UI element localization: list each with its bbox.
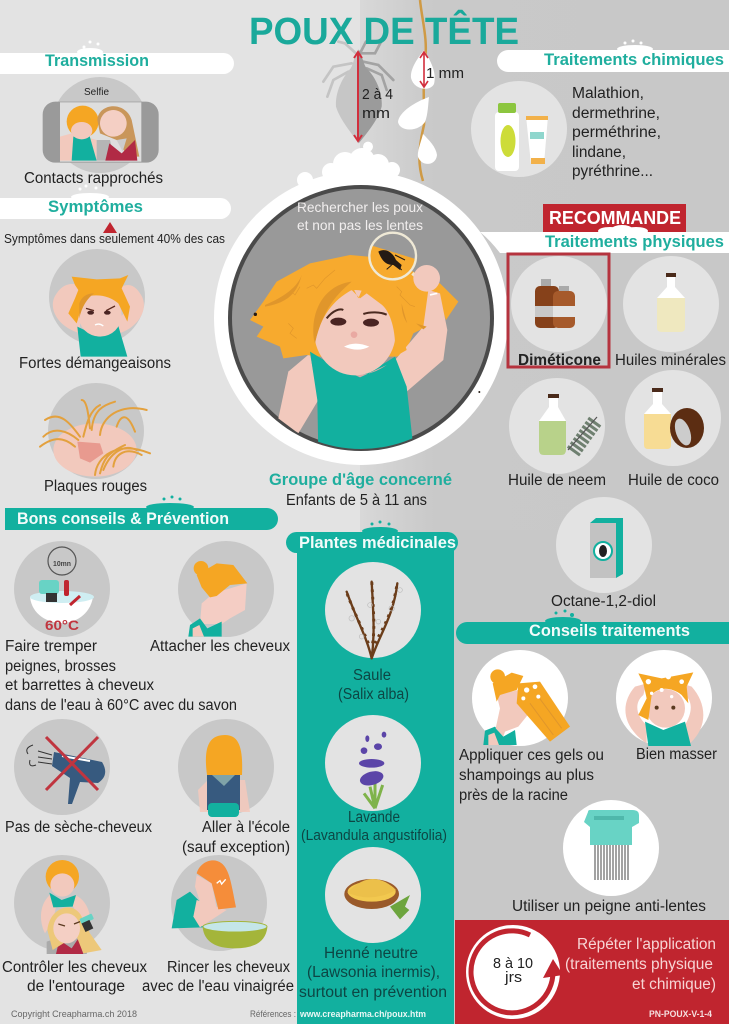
text: apply gel: près de la racine bbox=[459, 787, 568, 804]
text: check others: de l'entourage bbox=[27, 978, 125, 995]
plant: henna bbox=[325, 847, 421, 943]
title: POUX DE TÊTE bbox=[249, 9, 519, 53]
label: 2 à 4 mm: mm bbox=[362, 105, 390, 122]
icon: cycle 8 to 10 days: 8 à 10 bbox=[493, 955, 533, 972]
text: soak combs: dans de l'eau à 60°C avec du savon bbox=[5, 697, 237, 714]
panel: coconut oil bbox=[625, 370, 721, 466]
text: chemical list: dermethrine, bbox=[572, 105, 660, 122]
text: search lice bbox=[297, 199, 423, 233]
panel: school bbox=[178, 719, 274, 817]
panel: soak combs: 60°C bbox=[45, 617, 79, 633]
text: red patches: Plaques rouges bbox=[44, 478, 147, 495]
heading: plants: Plantes médicinales bbox=[299, 534, 456, 552]
arrow: 2 to 4 mm bbox=[354, 52, 362, 141]
section heading: physical treatments: Traitements physiques bbox=[545, 233, 724, 251]
text: chemical list: lindane, bbox=[572, 144, 626, 161]
section heading: treatment tips: Conseils traitements bbox=[529, 622, 690, 640]
section heading: prevention: Bons conseils & Prévention bbox=[17, 510, 229, 528]
text: chemical list: pyréthrine... bbox=[572, 163, 653, 180]
badge: recommended: RECOMMANDE bbox=[549, 208, 681, 228]
text: school: Aller à l'école bbox=[202, 819, 290, 836]
text: henna: Henné neutre bbox=[324, 945, 418, 962]
text: apply gel: Appliquer ces gels ou bbox=[459, 747, 604, 764]
text: repeat application: et chimique) bbox=[632, 976, 716, 993]
text: check others bbox=[2, 959, 147, 995]
icon: bottle bbox=[495, 103, 519, 171]
text: octane: Octane-1,2-diol bbox=[551, 593, 656, 610]
text: school bbox=[182, 819, 290, 856]
icon: oil bottle bbox=[657, 273, 685, 332]
icon: cycle 8 to 10 days bbox=[466, 925, 563, 1019]
text: willow: Saule bbox=[353, 667, 391, 684]
badge: recommended bbox=[543, 204, 686, 234]
icon: bowl bbox=[30, 580, 94, 623]
panel: itching bbox=[49, 249, 145, 357]
section heading: chemical treatments bbox=[497, 40, 729, 72]
footer: references bbox=[250, 1009, 426, 1020]
text: neem oil: Huile de neem bbox=[508, 472, 606, 489]
text: rinse: avec de l'eau vinaigrée bbox=[142, 978, 294, 995]
text: henna: (Lawsonia inermis), bbox=[307, 964, 440, 981]
panel: apply gel bbox=[472, 650, 570, 746]
footer: references: Références : bbox=[250, 1009, 296, 1020]
text: no hair dryer: Pas de sèche-cheveux bbox=[5, 819, 152, 836]
text: document code: PN-POUX-V-1-4 bbox=[649, 1009, 712, 1019]
panel: dimeticone: Diméticone bbox=[518, 352, 601, 369]
section heading: prevention bbox=[5, 496, 278, 530]
panel: rinse bbox=[171, 855, 267, 951]
panel: soak combs bbox=[14, 541, 110, 637]
text: itching: Fortes démangeaisons bbox=[19, 355, 171, 372]
text: school: (sauf exception) bbox=[182, 839, 290, 856]
text: search lice: Rechercher les poux bbox=[297, 199, 423, 215]
text: chemical list: Malathion, bbox=[572, 85, 644, 102]
text: check others: Contrôler les cheveux bbox=[2, 959, 147, 976]
text: contacts: Contacts rapprochés bbox=[24, 170, 163, 187]
text: massage: Bien masser bbox=[636, 746, 717, 763]
icon: bottle with coconut bbox=[644, 388, 704, 449]
icon: brown bottles bbox=[535, 279, 575, 328]
icon: green bottle with leaf bbox=[539, 394, 597, 455]
panel: chemical products bbox=[471, 81, 567, 177]
section heading: physical treatments bbox=[480, 225, 729, 253]
panel: no hair dryer bbox=[14, 719, 110, 815]
panel: selfie contacts: Selfie bbox=[84, 87, 109, 98]
panel: mineral oils bbox=[623, 256, 719, 352]
icon: tube bbox=[526, 116, 548, 164]
panel: selfie contacts bbox=[43, 77, 159, 173]
footer: references: www.creapharma.ch/poux.htm bbox=[299, 1009, 426, 1020]
icon: red cross bbox=[46, 737, 98, 790]
icon: timer: 10mn bbox=[53, 561, 71, 568]
text: age group: Groupe d'âge concerné bbox=[269, 471, 452, 489]
text: rinse bbox=[142, 959, 294, 995]
text: willow bbox=[338, 667, 409, 703]
panel: tie hair bbox=[178, 541, 274, 637]
panel: red patches bbox=[40, 383, 150, 479]
text: nit comb: Utiliser un peigne anti-lentes bbox=[512, 898, 706, 915]
plant: willow bbox=[325, 562, 421, 658]
text: soak combs bbox=[5, 638, 237, 714]
icon: phone selfie bbox=[43, 102, 159, 163]
text: repeat application: (traitements physique bbox=[565, 956, 713, 973]
text: repeat application: Répéter l'application bbox=[577, 936, 716, 953]
text: repeat application bbox=[565, 936, 716, 993]
text: apply gel: shampoings au plus bbox=[459, 767, 594, 784]
section heading: chemical treatments: Traitements chimiques bbox=[544, 51, 724, 69]
main circle illustration bbox=[214, 148, 508, 465]
text: lavender: (Lavandula angustifolia) bbox=[301, 828, 447, 844]
section heading: Transmission: Transmission bbox=[45, 52, 149, 70]
text: mineral oils: Huiles minérales bbox=[615, 352, 726, 369]
text: rinse: Rincer les cheveux bbox=[167, 959, 290, 976]
section heading: Transmission bbox=[0, 40, 234, 74]
panel: neem oil bbox=[509, 378, 605, 474]
panel: dimeticone bbox=[508, 254, 609, 369]
icon: anti-lice box bbox=[590, 518, 623, 578]
panel: massage bbox=[616, 650, 712, 746]
text: willow: (Salix alba) bbox=[338, 686, 409, 703]
plant: lavender bbox=[325, 715, 421, 811]
section heading: Symptômes: Symptômes bbox=[48, 198, 143, 216]
panel: medicinal plants column bbox=[286, 520, 458, 1024]
text: search lice: et non pas les lentes bbox=[297, 217, 423, 233]
heading: plants bbox=[286, 520, 458, 553]
text: warning: Symptômes dans seulement 40% des cas bbox=[4, 232, 225, 246]
arrow: 1 mm bbox=[420, 52, 428, 87]
label: 2 à 4 mm bbox=[362, 86, 393, 122]
text: soak combs: Faire tremper bbox=[5, 638, 97, 655]
text: coconut oil: Huile de coco bbox=[628, 472, 719, 489]
illustration: louse with size arrow bbox=[323, 41, 393, 152]
text: chemical list: perméthrine, bbox=[572, 124, 661, 141]
illustration: hair with nits bbox=[398, 0, 464, 181]
icon: cycle 8 to 10 days: jrs bbox=[504, 969, 522, 986]
text: apply gel bbox=[459, 747, 604, 804]
text: lavender: Lavande bbox=[348, 809, 400, 826]
text: age group bbox=[269, 471, 452, 509]
text: soak combs: et barrettes à cheveux bbox=[5, 677, 154, 694]
text: soak combs: peignes, brosses bbox=[5, 658, 116, 675]
panel: octane bbox=[556, 497, 652, 593]
text: lavender bbox=[301, 809, 447, 844]
text: tie hair: Attacher les cheveux bbox=[150, 638, 290, 655]
panel: repeat bbox=[455, 920, 729, 1024]
text: henna: surtout en prévention bbox=[299, 984, 447, 1001]
panel: nit comb bbox=[563, 800, 659, 896]
text: henna bbox=[299, 945, 447, 1001]
text: chemical list bbox=[572, 85, 661, 180]
panel: check others bbox=[14, 855, 110, 954]
icon: comb bbox=[584, 810, 639, 880]
label: 2 à 4 mm: 2 à 4 bbox=[362, 86, 393, 103]
section heading: Symptômes bbox=[0, 184, 231, 219]
label: 1 mm: 1 mm bbox=[426, 65, 464, 82]
text: age group: Enfants de 5 à 11 ans bbox=[286, 492, 427, 509]
icon: warning bbox=[103, 222, 117, 233]
footer: copyright: Copyright Creapharma.ch 2018 bbox=[11, 1009, 137, 1020]
section heading: treatment tips bbox=[456, 610, 729, 644]
